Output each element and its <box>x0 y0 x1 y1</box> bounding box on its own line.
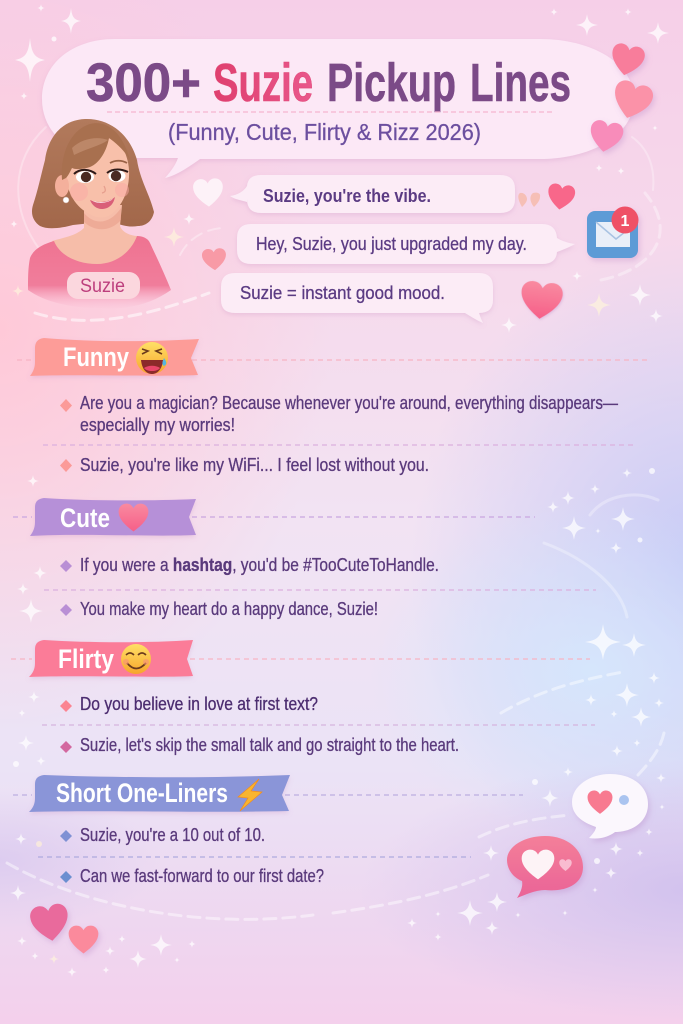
icon: large heart <box>519 280 564 321</box>
heading: Flirty: Flirty <box>58 644 114 674</box>
ribbon: Flirty <box>29 640 193 677</box>
icon: heart <box>119 504 148 532</box>
chat bubble 1 <box>230 175 515 213</box>
icon: white speech bubble <box>572 774 648 839</box>
icon: small drops <box>518 193 540 207</box>
list item: Do you believe in love at first text? <box>80 694 318 714</box>
icon: pink heart left of bubble 2 <box>202 248 227 271</box>
icon: white heart <box>193 178 224 207</box>
chat bubble 1: Suzie, you're the vibe. <box>263 185 431 206</box>
icon: lightning bolt <box>238 779 262 811</box>
list item: especially my worries! <box>80 415 235 435</box>
icon: mail notification <box>587 206 638 258</box>
bubble shape <box>42 39 634 178</box>
shirt <box>28 236 171 308</box>
hearts: top right <box>587 42 655 155</box>
list item: Can we fast-forward to our first date? <box>80 866 324 886</box>
name tag <box>67 272 140 299</box>
decorative swoosh lines <box>7 127 664 919</box>
character: Suzie <box>28 119 171 308</box>
fringe <box>62 123 130 180</box>
ribbon: Short One-Liners <box>29 775 290 812</box>
list item: Suzie, you're a 10 out of 10. <box>80 825 265 845</box>
list item: You make my heart do a happy dance, Suzie! <box>80 599 378 619</box>
section: Flirty <box>11 640 595 755</box>
list item <box>60 393 618 435</box>
icon: smiling emoji <box>121 644 151 674</box>
face <box>66 138 129 217</box>
icon: laughing emoji <box>136 342 168 374</box>
chat bubble 3 <box>221 273 493 323</box>
neck shadow <box>84 208 121 229</box>
ribbon: Cute <box>30 498 196 536</box>
title word: Lines <box>470 53 571 113</box>
icon: pink speech bubble <box>507 836 583 898</box>
heading: Cute: Cute <box>60 503 110 533</box>
subtitle: (Funny, Cute, Flirty & Rizz 2026) <box>168 119 481 145</box>
nose <box>102 186 105 193</box>
heading: Funny: Funny <box>63 342 129 372</box>
section: Funny <box>17 338 647 475</box>
eyes <box>74 161 128 183</box>
chat bubble 2 <box>237 224 575 264</box>
icon: hearts bottom left <box>29 902 98 954</box>
title number: 300+ <box>86 53 201 113</box>
title word: Pickup <box>327 53 456 113</box>
icon: pink heart right of bubble 1 <box>546 183 576 211</box>
neck and chest <box>52 205 138 266</box>
icon: mail notification: 1 <box>621 213 630 230</box>
chat bubble 3: Suzie = instant good mood. <box>240 282 445 303</box>
chat bubble 2: Hey, Suzie, you just upgraded my day. <box>256 233 527 254</box>
list item: Suzie, you're like my WiFi... I feel lost without you. <box>80 455 429 475</box>
title speech bubble <box>42 39 634 178</box>
heading: Short One-Liners: Short One-Liners <box>56 778 228 808</box>
name tag: Suzie <box>80 276 125 297</box>
ribbon: Funny <box>30 338 199 376</box>
mouth <box>90 197 115 209</box>
hair back <box>32 119 154 228</box>
list item: If you were a hashtag, you'd be #TooCuteToHandle. <box>80 555 439 575</box>
section: Cute <box>13 498 596 619</box>
section: Short One-Liners <box>13 775 523 886</box>
ear and earring <box>55 175 69 197</box>
list item: Suzie, let's skip the small talk and go straight to the heart. <box>80 735 459 755</box>
title accent word: Suzie <box>213 53 313 113</box>
